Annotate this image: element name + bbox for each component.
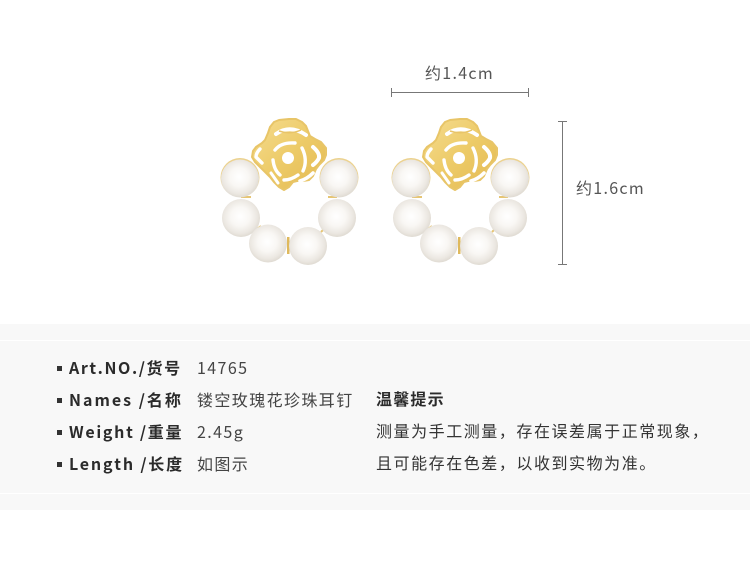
spec row: weight <box>57 419 244 443</box>
width dimension line <box>392 88 528 97</box>
notice text: 测量为手工测量，存在误差属于正常现象， <box>376 418 709 442</box>
spec row: article number: Art.NO./货号 <box>69 355 182 379</box>
spec row: article number <box>57 355 248 379</box>
spec row: name: 镂空玫瑰花珍珠耳钉 <box>197 387 354 411</box>
width label: 约1.4cm <box>425 60 494 84</box>
height dimension line <box>558 122 567 265</box>
spec row: length: 如图示 <box>197 451 249 475</box>
spec row: article number: 14765 <box>197 355 248 379</box>
earrings and dimension graphics <box>220 88 567 265</box>
spec row: name: Names /名称 <box>69 387 183 411</box>
spec row: length <box>57 451 249 475</box>
notice text: 且可能存在色差，以收到实物为准。 <box>376 450 657 474</box>
spec row: weight: Weight /重量 <box>69 419 183 443</box>
info band background <box>0 324 750 510</box>
notice heading: 温馨提示 <box>376 386 445 410</box>
earring: left <box>220 119 358 265</box>
notice text <box>376 418 709 474</box>
earring: right <box>392 119 530 265</box>
spec row: name <box>57 387 354 411</box>
height label: 约1.6cm <box>576 175 645 199</box>
spec row: length: Length /长度 <box>69 451 184 475</box>
spec row: weight: 2.45g <box>197 419 244 443</box>
